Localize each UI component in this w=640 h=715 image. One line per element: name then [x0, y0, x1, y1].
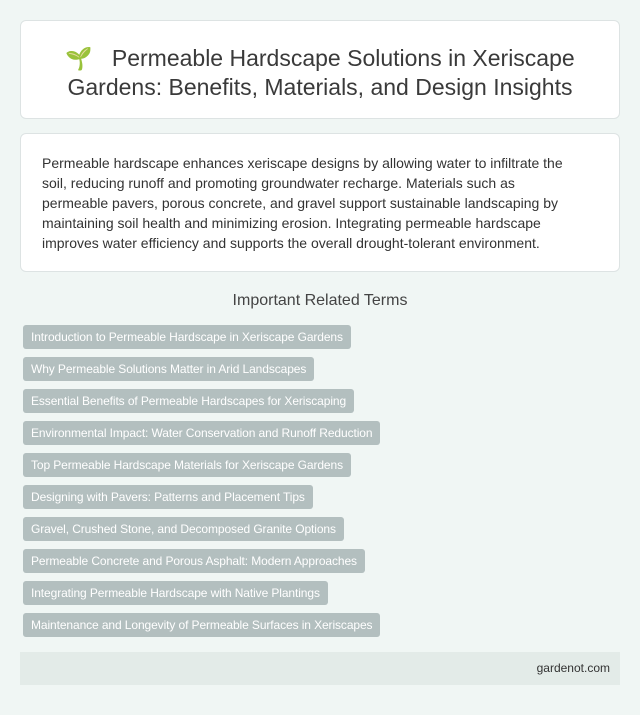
tag 10: [23, 613, 380, 637]
tag 8: [23, 549, 365, 573]
tag 9: [23, 581, 328, 605]
tag 10: Maintenance and Longevity of Permeable Surfaces in Xeriscapes: [31, 618, 372, 632]
tag 7: Gravel, Crushed Stone, and Decomposed Granite Options: [31, 522, 336, 536]
tag 4: [23, 421, 380, 445]
tag 5: [23, 453, 351, 477]
tag 2: [23, 357, 314, 381]
tag 6: [23, 485, 313, 509]
tag 6: Designing with Pavers: Patterns and Placement Tips: [31, 490, 305, 504]
tag 4: Environmental Impact: Water Conservation and Runoff Reduction: [31, 426, 372, 440]
tag 1: [23, 325, 351, 349]
tag 3: Essential Benefits of Permeable Hardscapes for Xeriscaping: [31, 394, 346, 408]
tag 9: Integrating Permeable Hardscape with Native Plantings: [31, 586, 320, 600]
tag 2: Why Permeable Solutions Matter in Arid Landscapes: [31, 362, 306, 376]
heading: related terms: Important Related Terms: [233, 292, 407, 309]
title card: [20, 20, 620, 119]
tag 3: [23, 389, 354, 413]
footer: gardenot.com: [537, 661, 610, 675]
tag 8: Permeable Concrete and Porous Asphalt: Modern Approaches: [31, 554, 357, 568]
title: 🌱 Permeable Hardscape Solutions in Xeriscape Gardens: Benefits, Materials, and Design Insights: [65, 45, 575, 100]
tag 1: Introduction to Permeable Hardscape in Xeriscape Gardens: [31, 330, 343, 344]
description card: [20, 133, 620, 272]
tag 7: [23, 517, 344, 541]
description text: Permeable hardscape enhances xeriscape designs by allowing water to infiltrate the soil, reducing runoff and promoting groundwater recharge. Materials such as permeable pavers, porous concrete, and gravel support sustainable landscaping by maintaining soil health and minimizing erosion. Integrating permeable hardscape improves water efficiency and supports the overall drought-tolerant environment.: [42, 155, 563, 251]
footer: [20, 652, 620, 685]
tag 5: Top Permeable Hardscape Materials for Xeriscape Gardens: [31, 458, 343, 472]
